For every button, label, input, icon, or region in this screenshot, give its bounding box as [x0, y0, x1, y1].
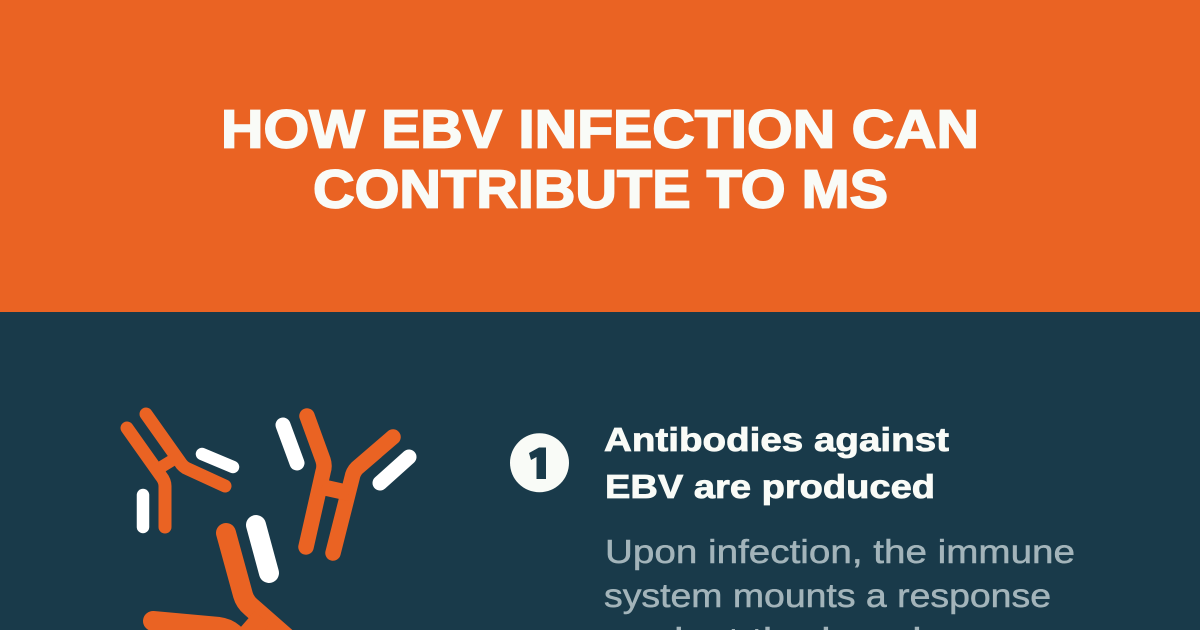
- icon: large antibody: [153, 533, 300, 630]
- title: [221, 100, 979, 220]
- step description: [604, 533, 1075, 630]
- illustration: antibodies and antigens: [127, 414, 409, 630]
- icon: small antibody: [127, 414, 225, 527]
- panel: dark teal content area: [0, 312, 1200, 630]
- icon: large antibody fragment: [256, 525, 269, 573]
- icon: medium antibody: [306, 416, 393, 553]
- icon: small antibody fragments: [143, 454, 233, 527]
- step heading: [604, 421, 949, 505]
- step description: system mounts a response: [604, 577, 1051, 614]
- step number badge: [510, 433, 569, 492]
- title: HOW EBV INFECTION CAN: [221, 100, 979, 160]
- step heading: Antibodies against: [604, 421, 949, 458]
- title: CONTRIBUTE TO MS: [313, 160, 888, 220]
- panel: orange title banner: [0, 0, 1200, 312]
- step description: Upon infection, the immune: [605, 533, 1075, 570]
- icon: medium antibody fragments: [283, 425, 409, 483]
- step heading: EBV are produced: [605, 468, 935, 505]
